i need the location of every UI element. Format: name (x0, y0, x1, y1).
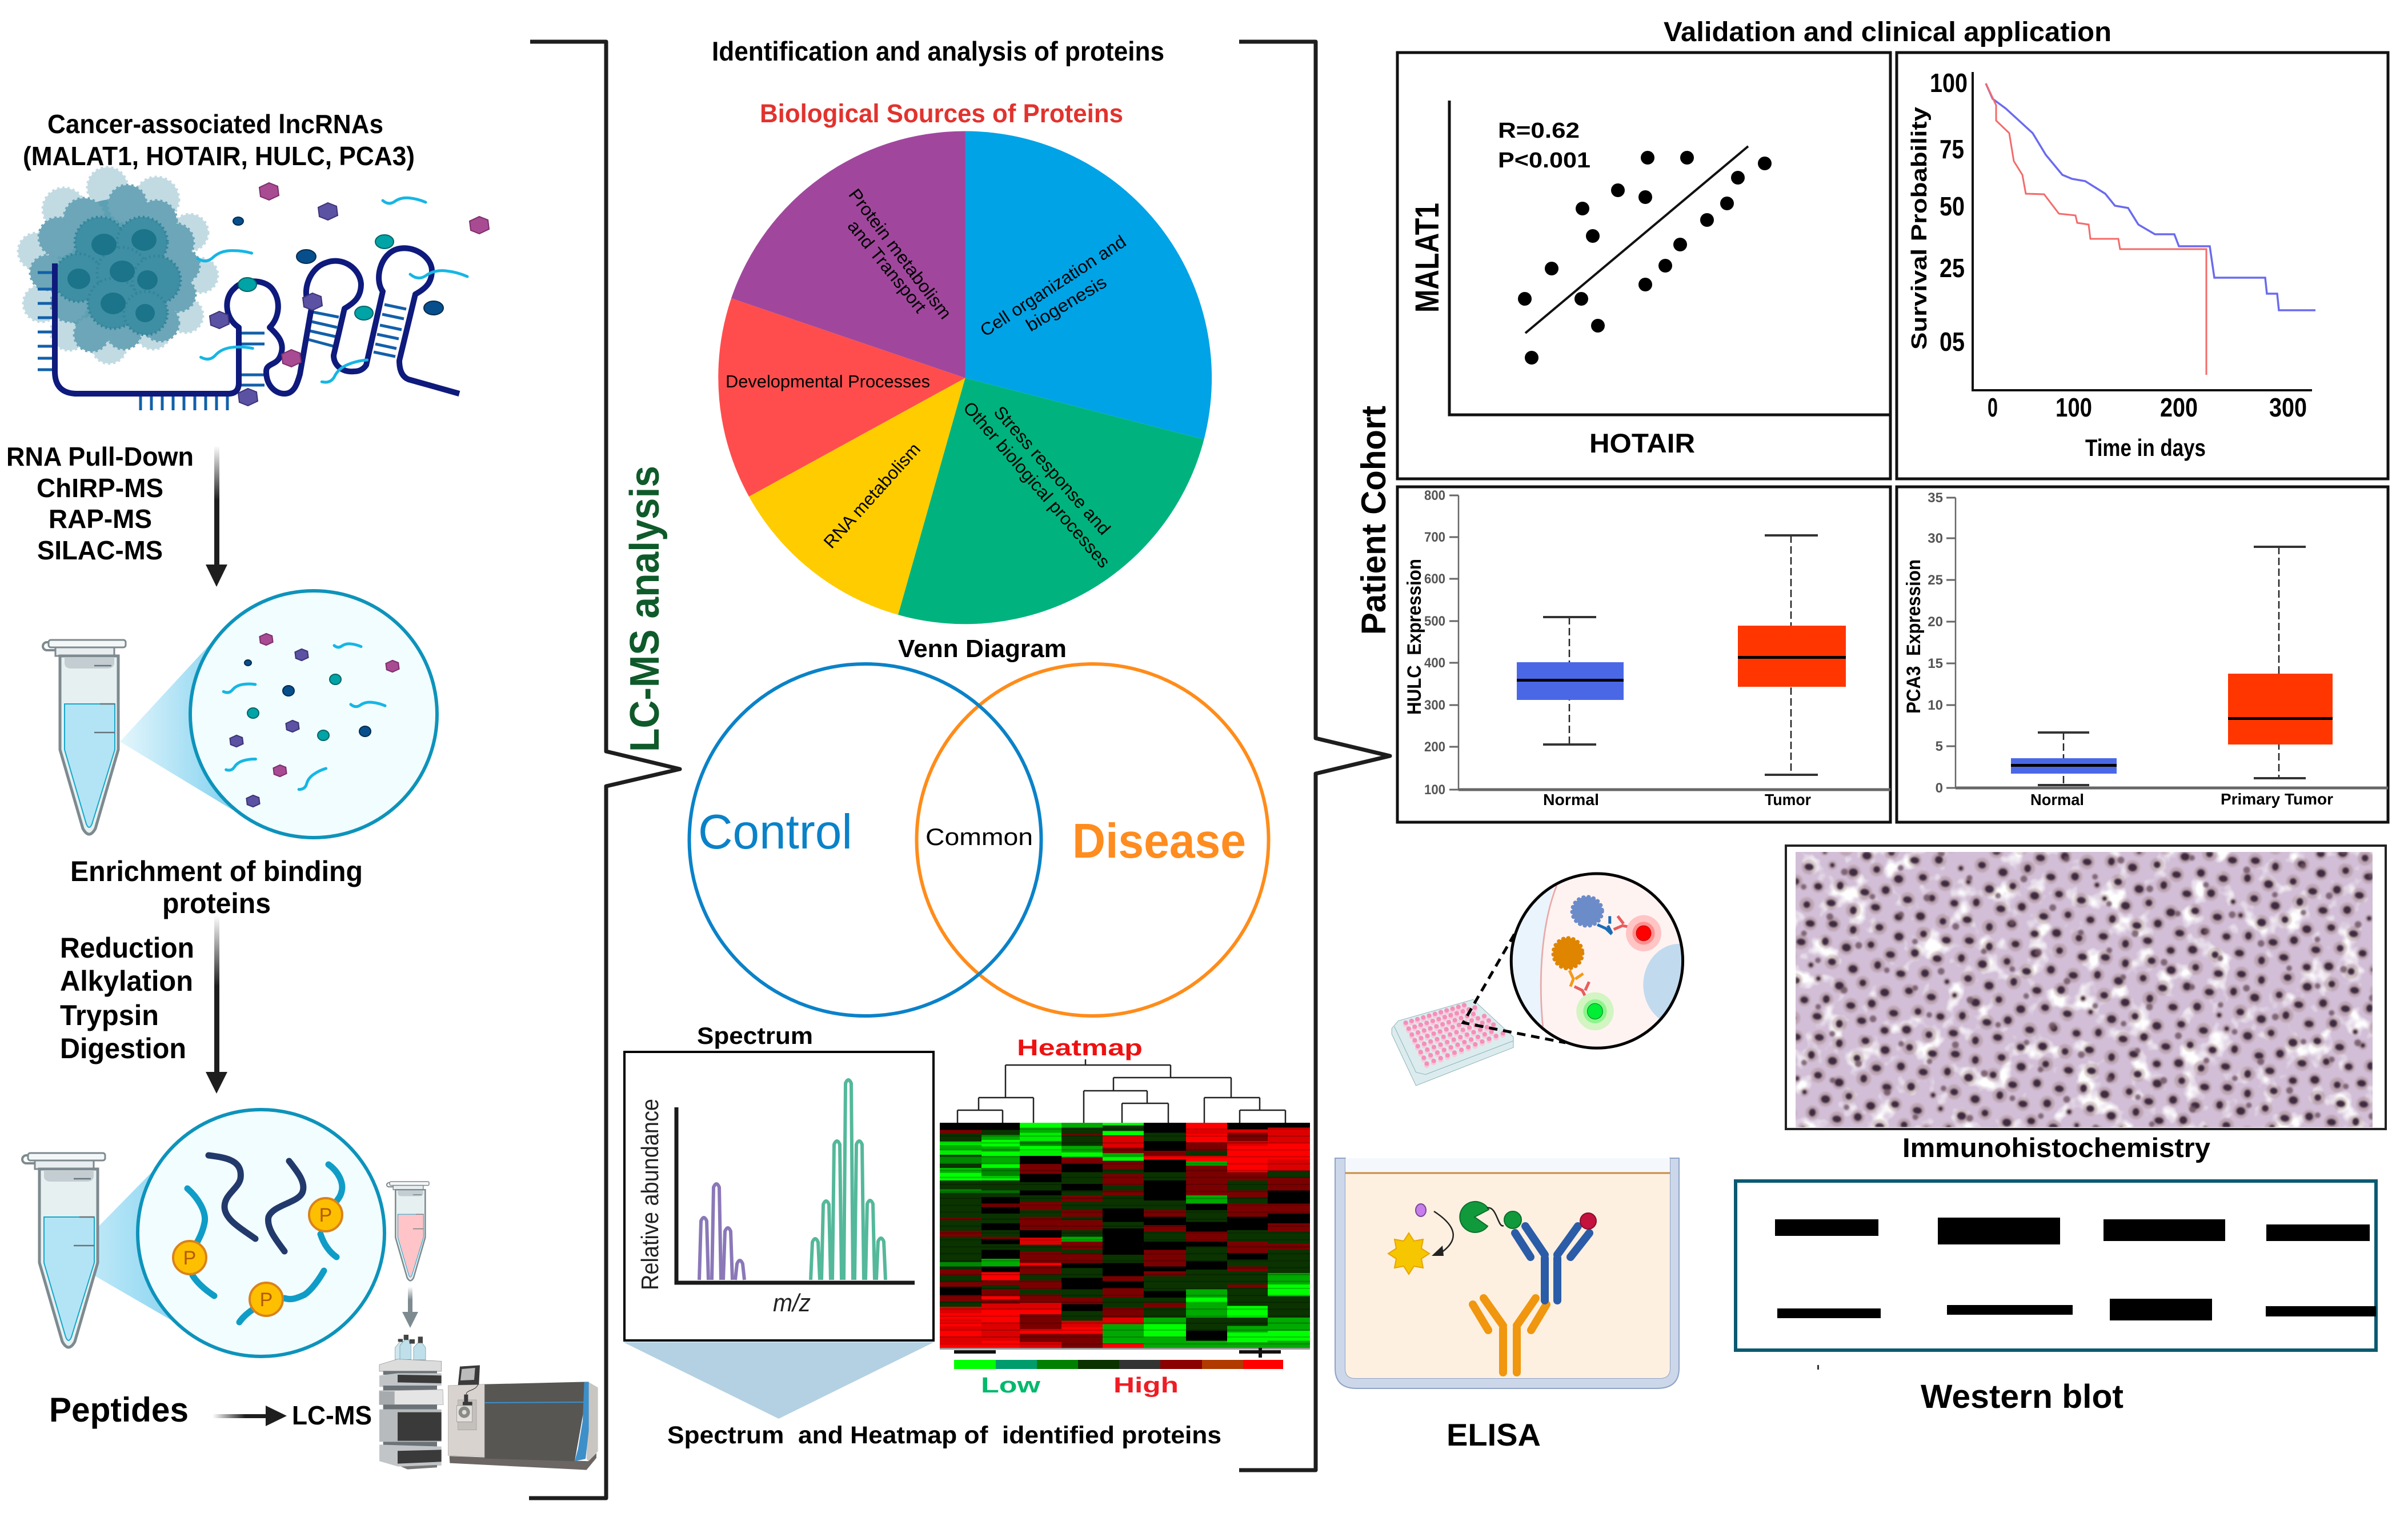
panel: PCA3 box plot: PCA3 Expression (1903, 559, 1925, 714)
arrow: peptides to LC-MS (213, 1406, 287, 1426)
label: western blot: Western blot (1921, 1378, 2123, 1415)
pie chart: biological sources of proteins: Cell organization and (976, 231, 1129, 341)
chart: protein expression heatmap (940, 1123, 1310, 1348)
label: LC-MS analysis: LC-MS analysis (622, 466, 668, 752)
pie chart: biological sources of proteins (718, 131, 1212, 624)
arrow: pull-down to enrichment (206, 446, 227, 587)
heading: cancer-associated lncRNAs (23, 109, 415, 171)
panel: correlation scatter plot: R=0.62 (1498, 119, 1580, 143)
icon: LC stack (379, 1359, 443, 1470)
ELISA well (1335, 1158, 1679, 1388)
panel: western blot (1736, 1181, 2376, 1370)
pie chart: biological sources of proteins: Protein metabolism (845, 185, 956, 323)
panel: HULC box plot (1397, 487, 1890, 822)
chart: mass spectrum peaks: m/z (773, 1289, 811, 1317)
panel: HULC box plot: 800 (1424, 488, 1445, 503)
venn diagram: Common (925, 823, 1033, 850)
panel: survival curve: 100 (2056, 393, 2092, 422)
label: enrichment of binding proteins (70, 855, 363, 919)
panel: survival curve: 100 (1930, 68, 1968, 98)
heatmap legend (940, 1347, 1310, 1398)
panel: HULC box plot: 300 (1424, 698, 1445, 713)
icon: detection antibody (1515, 1226, 1589, 1300)
venn diagram: Control (698, 805, 852, 859)
panel: HULC box plot: Normal (1543, 791, 1599, 808)
panel: PCA3 box plot: Primary Tumor (2221, 790, 2333, 808)
label: immunohistochemistry: Immunohistochemistry (1902, 1132, 2210, 1163)
chart: mass spectrum peaks: Relative abundance (636, 1099, 663, 1290)
arrow: digestion to peptides (206, 915, 227, 1094)
circle: enriched protein mixture (190, 591, 437, 838)
pie chart: biological sources of proteins: RNA metabolism (820, 439, 924, 552)
heading: heatmap: Heatmap (1017, 1035, 1143, 1060)
triangle: spectrum pointer (623, 1342, 934, 1419)
circle: peptides (138, 1110, 384, 1356)
pie chart: biological sources of proteins: Developmental Processes (726, 371, 930, 391)
arrow: tube to LC-MS instrument (402, 1287, 418, 1328)
panel: correlation scatter plot: MALAT1 (1409, 203, 1446, 313)
method list: digestion steps: Reduction (60, 932, 194, 964)
method list: digestion steps: Digestion (60, 1032, 186, 1064)
method list: digestion steps: Alkylation (60, 965, 193, 997)
panel: correlation scatter plot (1397, 53, 1890, 479)
panel: PCA3 box plot: 15 (1928, 656, 1943, 671)
panel: HULC box plot: 400 (1424, 655, 1445, 671)
icon: LC-MS instrument (379, 1335, 598, 1470)
icon: blue sample tube (43, 640, 126, 834)
panel: PCA3 box plot: 0 (1936, 780, 1943, 796)
label: enrichment of binding proteins: proteins (162, 887, 271, 919)
icon: lncRNA hairpin structure (38, 248, 459, 410)
bracket: right of LC-MS panel (1239, 42, 1390, 1470)
pie chart: biological sources of proteins: Stress response and (990, 402, 1115, 539)
panel: survival curve: 50 (1940, 191, 1965, 221)
method list: pull-down techniques: SILAC-MS (37, 535, 163, 565)
method list: digestion steps: Trypsin (60, 999, 159, 1031)
panel: PCA3 box plot: Normal (2030, 791, 2084, 808)
panel: correlation scatter plot: HOTAIR (1589, 428, 1695, 458)
panel: HULC box plot: Tumor (1765, 791, 1811, 808)
panel: HULC box plot: 600 (1424, 571, 1445, 587)
heading: cancer-associated lncRNAs: Cancer-associated lncRNAs (47, 109, 383, 139)
panel: HULC box plot: 200 (1424, 739, 1445, 755)
spectrum panel (624, 1022, 933, 1340)
panel: PCA3 box plot: 25 (1928, 573, 1943, 588)
heading: biological sources: Biological Sources of Proteins (760, 99, 1123, 128)
panel: HULC box plot: 100 (1424, 782, 1445, 798)
method list: pull-down techniques: RNA Pull-Down (6, 442, 194, 471)
panel: survival curve: Survival Probability (1908, 107, 1932, 350)
heatmap legend: Low (981, 1374, 1041, 1398)
label: peptides: Peptides (49, 1391, 189, 1429)
icon: tumour cell cluster (18, 167, 218, 363)
panel: PCA3 box plot: 30 (1928, 531, 1943, 546)
heatmap legend: High (1113, 1374, 1179, 1398)
icon: mass spectrometer (448, 1365, 598, 1470)
pie chart: biological sources of proteins: and Transport (844, 216, 931, 317)
circle: peptides: P (319, 1204, 332, 1226)
heading: validation and clinical application: Validation and clinical application (1664, 17, 2111, 47)
label: LC-MS: LC-MS (292, 1400, 372, 1430)
left column: cancer lncRNAs (18, 109, 489, 410)
heading: identification and analysis: Identification and analysis of proteins (712, 36, 1164, 66)
callout: zoomed well contents (1509, 872, 1684, 1050)
panel: survival curve: 05 (1940, 327, 1965, 357)
icon: blue peptide tube (22, 1153, 105, 1347)
dendrogram (957, 1059, 1285, 1123)
label: Patient Cohort: Patient Cohort (1355, 406, 1393, 635)
panel: PCA3 box plot: 5 (1936, 739, 1943, 754)
panel: survival curve: 0 (1988, 393, 1998, 422)
icon: 96-well plate (1392, 999, 1513, 1086)
panel: correlation scatter plot: P<0.001 (1498, 149, 1590, 173)
heading: spectrum: Spectrum (697, 1022, 813, 1049)
method list: pull-down techniques (6, 442, 194, 565)
pie chart: biological sources of proteins: Other biological processes (959, 398, 1114, 572)
method list: pull-down techniques: RAP-MS (49, 504, 152, 534)
panel: survival curve: 300 (2269, 393, 2307, 422)
venn diagram: Disease (1072, 814, 1246, 868)
caption: spectrum and heatmap: Spectrum and Heatmap of identified proteins (667, 1422, 1221, 1449)
panel: PCA3 box plot: 10 (1928, 698, 1943, 713)
panel: HULC box plot: HULC Expression (1404, 559, 1425, 715)
peptides: tube and magnified circle (22, 1110, 384, 1356)
panel: PCA3 box plot: 35 (1928, 490, 1943, 506)
panel: survival curve: 75 (1940, 134, 1964, 164)
panel: HULC box plot: 500 (1424, 614, 1445, 629)
circle: peptides: P (183, 1247, 196, 1269)
icon: pink sample tube (387, 1182, 429, 1280)
method list: pull-down techniques: ChIRP-MS (37, 473, 163, 503)
panel: PCA3 box plot (1897, 487, 2388, 822)
circle: peptides: P (260, 1289, 273, 1311)
heading: venn diagram: Venn Diagram (898, 635, 1067, 663)
icon: enzyme and substrate (1388, 1202, 1596, 1274)
bracket: left of LC-MS panel (529, 42, 680, 1498)
label: enrichment of binding proteins: Enrichment of binding (70, 855, 363, 887)
enrichment: tube and magnified circle (43, 591, 437, 838)
label: ELISA: ELISA (1447, 1417, 1541, 1452)
panel: survival curve: 25 (1940, 253, 1965, 283)
panel: HULC box plot: 700 (1424, 530, 1445, 545)
dotted zoom lines (1463, 934, 1565, 1043)
wedge: tube magnification (66, 1166, 189, 1330)
wedge: tube magnification (120, 645, 233, 810)
heading: cancer-associated lncRNAs: (MALAT1, HOTAIR, HULC, PCA3) (23, 141, 415, 171)
icon: solvent bottles (395, 1335, 426, 1360)
panel: survival curve (1897, 53, 2388, 479)
icon: multi-well plate with fluorescent zoom (1392, 874, 1716, 1086)
panel: immunohistochemistry image (1786, 846, 2386, 1129)
panel: survival curve: 200 (2160, 393, 2198, 422)
panel: survival curve: Time in days (2085, 434, 2206, 461)
icon: capture antibody (1473, 1298, 1546, 1372)
venn diagram (689, 635, 1268, 1016)
icon: bound proteins around RNA (197, 183, 489, 406)
pie chart: biological sources of proteins: biogenesis (1023, 272, 1110, 335)
panel: PCA3 box plot: 20 (1928, 614, 1943, 630)
method list: digestion steps (60, 932, 194, 1064)
chart: mass spectrum peaks (636, 1080, 915, 1317)
